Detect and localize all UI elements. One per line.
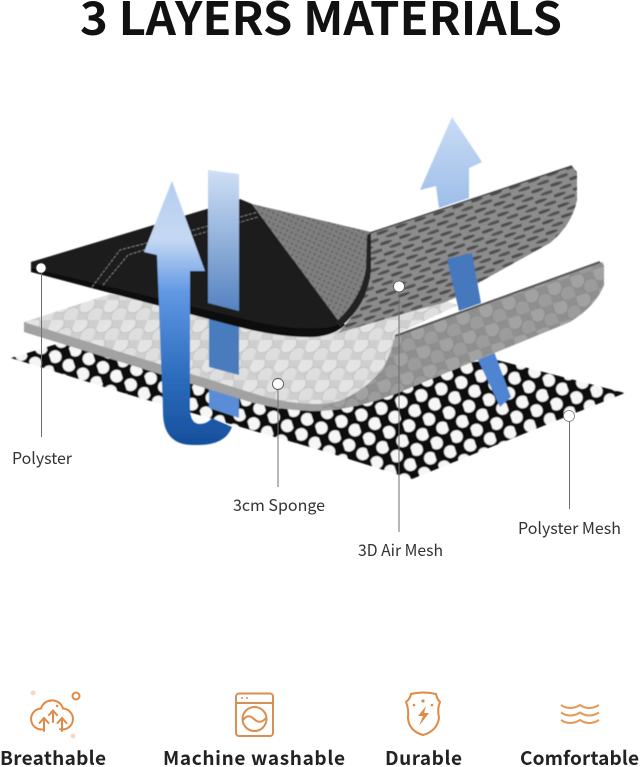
diagram: three layers with airflow arrows	[11, 117, 625, 479]
arrow: middle bar segment over sponge	[209, 310, 239, 375]
label: Polyster	[12, 263, 73, 469]
arrow: right arrow head	[420, 117, 482, 208]
arrow: lower bar segment behind sponge	[209, 384, 239, 418]
feature: Durable	[385, 692, 462, 767]
label: 3D Air Mesh	[358, 281, 443, 561]
arrow: middle bar top segment	[208, 170, 239, 311]
layer: 3D air mesh	[338, 166, 577, 333]
icon: comfort waves	[561, 705, 599, 723]
label: 3cm Sponge	[233, 378, 325, 516]
feature: Machine washable	[163, 694, 345, 767]
layer: polyester mesh	[11, 343, 625, 479]
arrow: right arrow lower segment	[472, 341, 511, 407]
icon: washing machine	[236, 694, 273, 736]
feature: Comfortable	[520, 705, 639, 767]
icon: shield with lightning	[406, 692, 440, 735]
arrow: curved blue airflow arrow	[144, 181, 232, 445]
feature: Breathable	[0, 690, 106, 767]
label: Polyster Mesh	[518, 410, 621, 539]
arrow: right arrow middle segment	[447, 253, 481, 311]
layer: 3cm sponge	[24, 262, 604, 411]
label: 3D Air Mesh: 3D Air Mesh	[358, 537, 443, 561]
layer: polyester top	[31, 199, 371, 337]
label: 3cm Sponge: 3cm Sponge	[233, 492, 325, 516]
icon: breathable cloud	[30, 690, 80, 738]
label: Polyster: Polyster	[12, 445, 73, 469]
label: Polyster Mesh: Polyster Mesh	[518, 515, 621, 539]
